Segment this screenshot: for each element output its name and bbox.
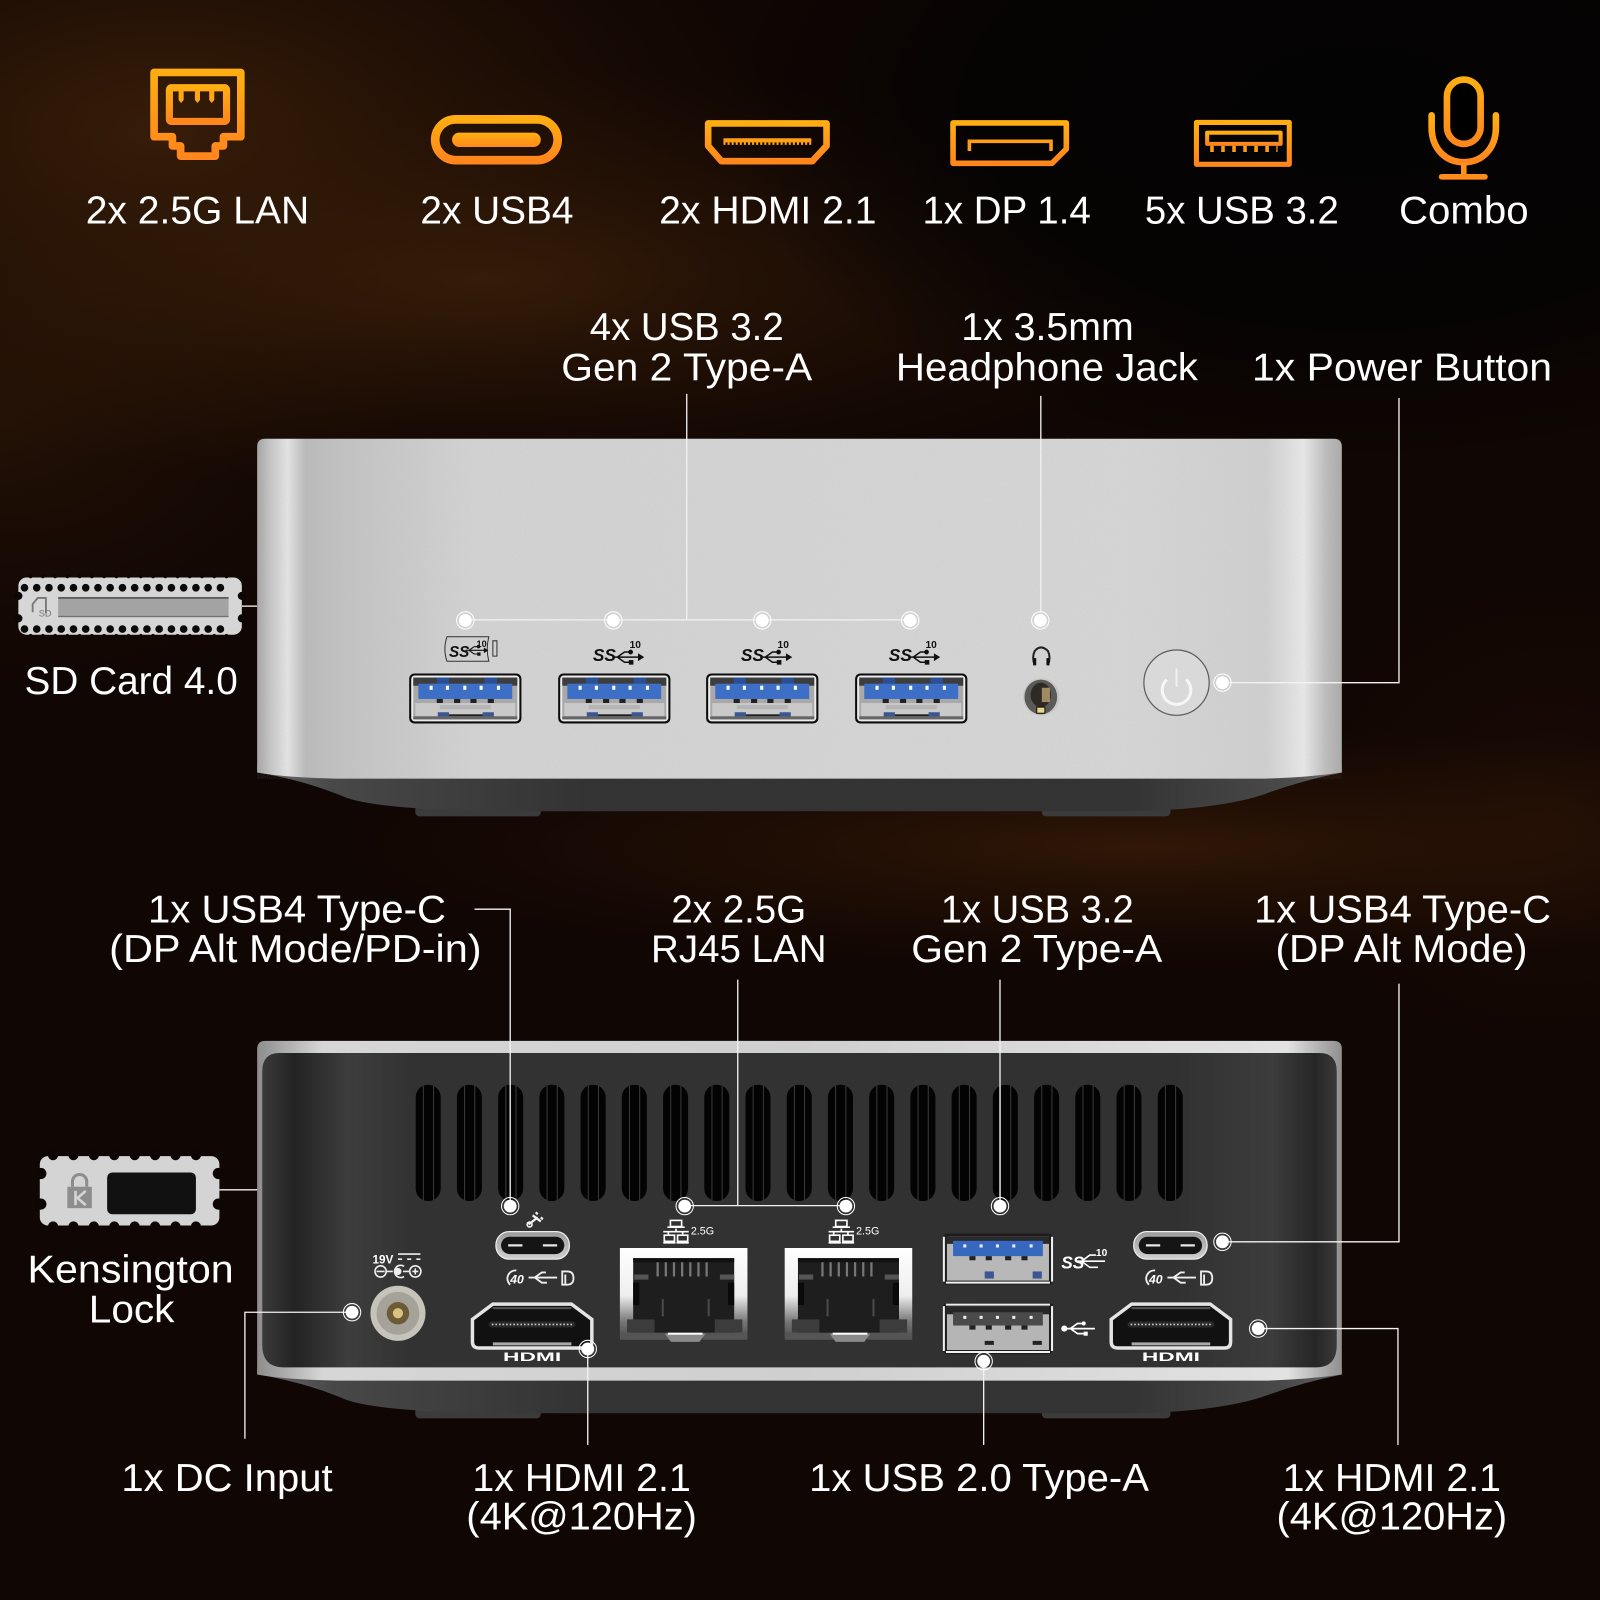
label: 1x USB4 Type-C DP Alt Mode: 1x USB4 Type-C [1254, 887, 1551, 931]
callout dots and lines: front [457, 394, 1399, 691]
USB-C port right with icons [1134, 1232, 1212, 1287]
USB-A port 1 with SS logo [409, 637, 521, 723]
panel: Kensington inset [35, 1155, 224, 1227]
label: 4x USB 3.2 Gen 2 Type-A: Gen 2 Type-A [561, 346, 813, 390]
label: 1x HDMI 2.1 left: (4K@120Hz) [466, 1495, 697, 1539]
Kensington slot [107, 1172, 196, 1214]
HDMI port right: HDMI [1142, 1350, 1200, 1364]
HDMI port left: HDMI [503, 1350, 561, 1364]
HDMI port left [472, 1304, 592, 1364]
icon: microphone combo [1432, 80, 1496, 180]
label: Combo: Combo [1399, 188, 1529, 232]
vent slots [416, 1085, 1183, 1201]
panel: SD card inset [14, 577, 246, 636]
icon: HDMI [708, 123, 827, 161]
device base [257, 1367, 1342, 1418]
label: 1x HDMI 2.1 right: (4K@120Hz) [1277, 1495, 1507, 1539]
headphone jack [1023, 647, 1060, 716]
label: 1x USB4 Type-C DP Alt Mode/PD-in: 1x USB4 Type-C [148, 887, 446, 931]
USB-A port 3 with SS logo: SS [741, 645, 764, 665]
SS 10 logo rear [1061, 1248, 1108, 1272]
label: 2x HDMI 2.1: 2x HDMI 2.1 [659, 188, 877, 232]
label: 1x USB4 Type-C DP Alt Mode [1254, 887, 1551, 971]
label: 1x USB4 Type-C DP Alt Mode/PD-in [109, 887, 482, 971]
icon: USB-C [435, 119, 558, 160]
leader line: Kensington [219, 1189, 257, 1191]
label: 1x USB 3.2 Gen 2 Type-A: 1x USB 3.2 [941, 887, 1134, 931]
label: 1x USB4 Type-C DP Alt Mode/PD-in: (DP Alt Mode/PD-in) [109, 927, 482, 971]
USB-A port 2 with SS logo [558, 640, 670, 723]
label: 2x 2.5G RJ45 LAN: RJ45 LAN [651, 927, 827, 971]
label: Kensington Lock: Kensington [28, 1248, 234, 1292]
USB-C port left with icons: 40 [509, 1273, 524, 1287]
LAN port 2: 2.5G [856, 1226, 879, 1238]
label: 4x USB 3.2 Gen 2 Type-A: 4x USB 3.2 [590, 305, 784, 349]
label: 1x 3.5mm Headphone Jack: Headphone Jack [896, 346, 1198, 390]
USB-C port right with icons: 40 [1148, 1273, 1163, 1287]
label: 1x DC Input: 1x DC Input [121, 1456, 333, 1500]
icon: USB 3.2 [1196, 122, 1289, 164]
SS 10 logo rear: SS [1061, 1252, 1085, 1272]
label: 1x USB 3.2 Gen 2 Type-A: Gen 2 Type-A [911, 927, 1163, 971]
label: 1x 3.5mm Headphone Jack: 1x 3.5mm [961, 305, 1134, 349]
label: 2x USB4: 2x USB4 [420, 188, 573, 232]
USB symbol rear [1061, 1321, 1095, 1336]
icon row [154, 72, 1496, 180]
USB-A port 3 with SS logo [706, 640, 818, 723]
USB-A port 4 with SS logo: 10 [926, 640, 937, 651]
SD slot [58, 597, 229, 617]
icon: SD card [33, 598, 52, 618]
USB-A port 3 with SS logo: 10 [778, 640, 789, 651]
LAN port 1 [620, 1220, 747, 1342]
panel: rear device [245, 909, 1399, 1445]
icon: SD card: SD [39, 608, 52, 618]
label: 1x DP 1.4: 1x DP 1.4 [922, 188, 1091, 232]
label: 2x 2.5G LAN: 2x 2.5G LAN [86, 188, 309, 232]
SS 10 logo rear: 10 [1096, 1248, 1108, 1259]
silver rim [257, 1041, 1342, 1381]
USB-A port 4 with SS logo [855, 640, 967, 723]
USB-A port 1 with SS logo: SS [449, 644, 470, 661]
USB-A port 1 with SS logo: 10 [477, 639, 487, 649]
label: 2x 2.5G RJ45 LAN: 2x 2.5G [671, 887, 806, 931]
feature labels [86, 188, 1529, 232]
device base [257, 765, 1342, 816]
USB 2.0 port rear [943, 1303, 1053, 1354]
USB-C port left with icons [496, 1212, 573, 1287]
label: 1x 3.5mm Headphone Jack [896, 305, 1198, 390]
LAN port 2 [785, 1220, 912, 1342]
label: 1x HDMI 2.1 left [466, 1456, 697, 1539]
HDMI port right [1111, 1304, 1231, 1364]
label: 2x 2.5G RJ45 LAN [651, 887, 827, 971]
label: 5x USB 3.2: 5x USB 3.2 [1145, 188, 1339, 232]
icon: DisplayPort [953, 123, 1066, 163]
device front body [257, 439, 1342, 779]
label: 1x USB 3.2 Gen 2 Type-A [911, 887, 1163, 971]
USB 3.2 port rear [943, 1234, 1053, 1285]
label: 1x HDMI 2.1 right [1277, 1456, 1507, 1539]
icon: Kensington lock [67, 1174, 92, 1208]
label: Kensington Lock: Lock [89, 1287, 175, 1331]
LAN port 1: 2.5G [691, 1226, 714, 1238]
label: 1x HDMI 2.1 right: 1x HDMI 2.1 [1283, 1456, 1501, 1500]
DC input port [370, 1253, 426, 1341]
leader line: SD card [242, 605, 257, 607]
label: Kensington Lock [28, 1248, 234, 1331]
label: 1x HDMI 2.1 left: 1x HDMI 2.1 [472, 1456, 691, 1500]
DC input port: 19V [372, 1253, 393, 1266]
label: 1x Power Button: 1x Power Button [1252, 346, 1552, 390]
label: 1x USB 2.0 Type-A: 1x USB 2.0 Type-A [809, 1456, 1150, 1500]
panel: front device [257, 394, 1399, 816]
USB-A port 4 with SS logo: SS [889, 645, 912, 665]
power button [1144, 650, 1209, 715]
dark rear panel [262, 1053, 1337, 1367]
icon: LAN [154, 72, 241, 156]
label: SD Card 4.0: SD Card 4.0 [24, 659, 238, 703]
callout dots and lines: rear [245, 909, 1399, 1445]
label: 1x USB4 Type-C DP Alt Mode: (DP Alt Mode) [1276, 927, 1528, 971]
USB-A port 2 with SS logo: 10 [630, 640, 641, 651]
USB-A port 2 with SS logo: SS [593, 645, 616, 665]
label: 4x USB 3.2 Gen 2 Type-A [561, 305, 813, 390]
